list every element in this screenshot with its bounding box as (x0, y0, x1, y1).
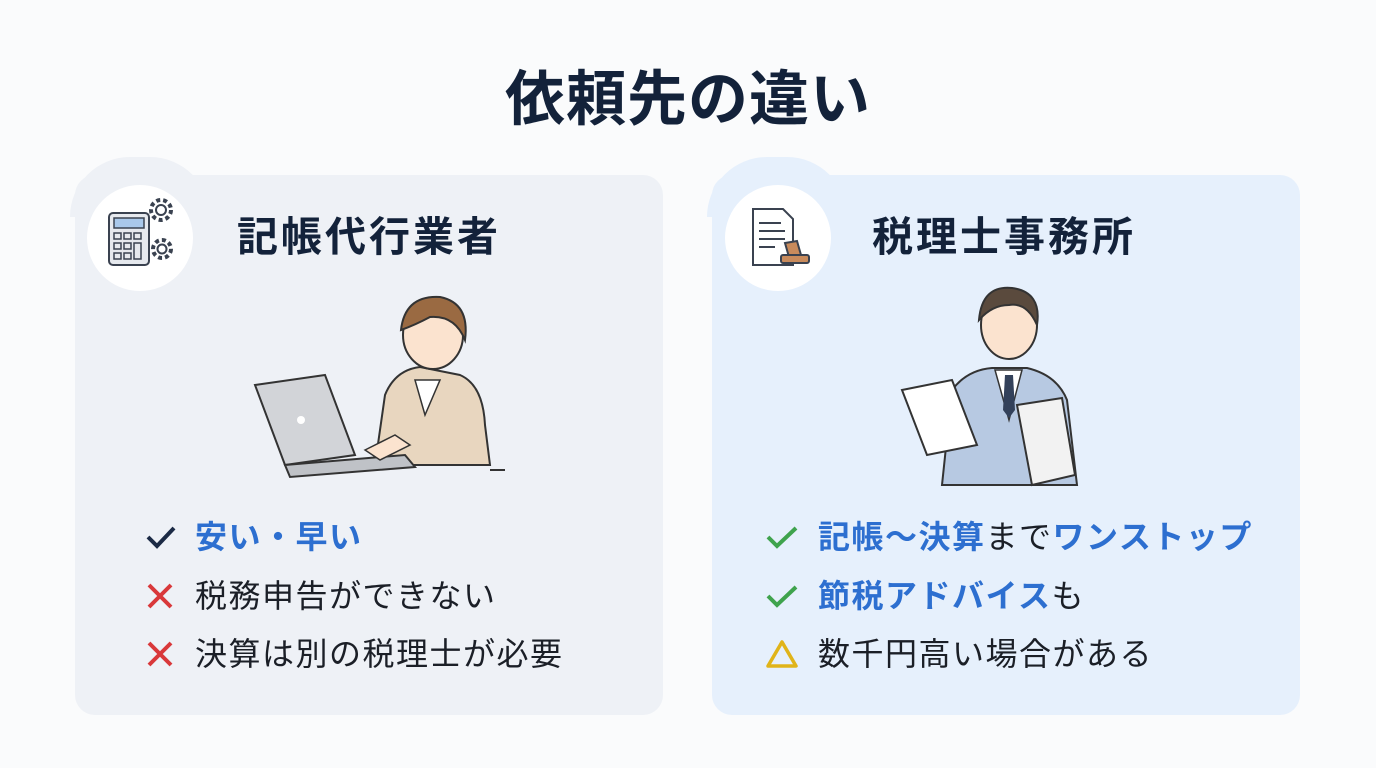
list: agency pros/cons (146, 519, 564, 672)
heading: 税理士事務所 (872, 214, 1136, 260)
item: tax saving advice: 節税アドバイスも (818, 578, 1085, 614)
icon: calculator with gears (87, 185, 193, 291)
illustration: man at laptop (254, 296, 505, 478)
illustration: accountant with documents (900, 286, 1078, 486)
item: cannot file tax: 税務申告ができない (195, 578, 497, 614)
icon: document with stamp (725, 185, 831, 291)
item: one-stop: 記帳〜決算までワンストップ (818, 519, 1253, 555)
title: 依頼先の違い (505, 66, 871, 133)
panel: tax accountant office (707, 157, 1300, 715)
heading: 記帳代行業者 (237, 214, 501, 260)
panel: bookkeeping agency (70, 157, 663, 715)
item: cheap fast: 安い・早い (195, 519, 363, 555)
item: can cost more: 数千円高い場合がある (818, 636, 1153, 672)
list: office pros/cons (766, 519, 1253, 672)
item: need separate accountant: 決算は別の税理士が必要 (195, 636, 564, 672)
